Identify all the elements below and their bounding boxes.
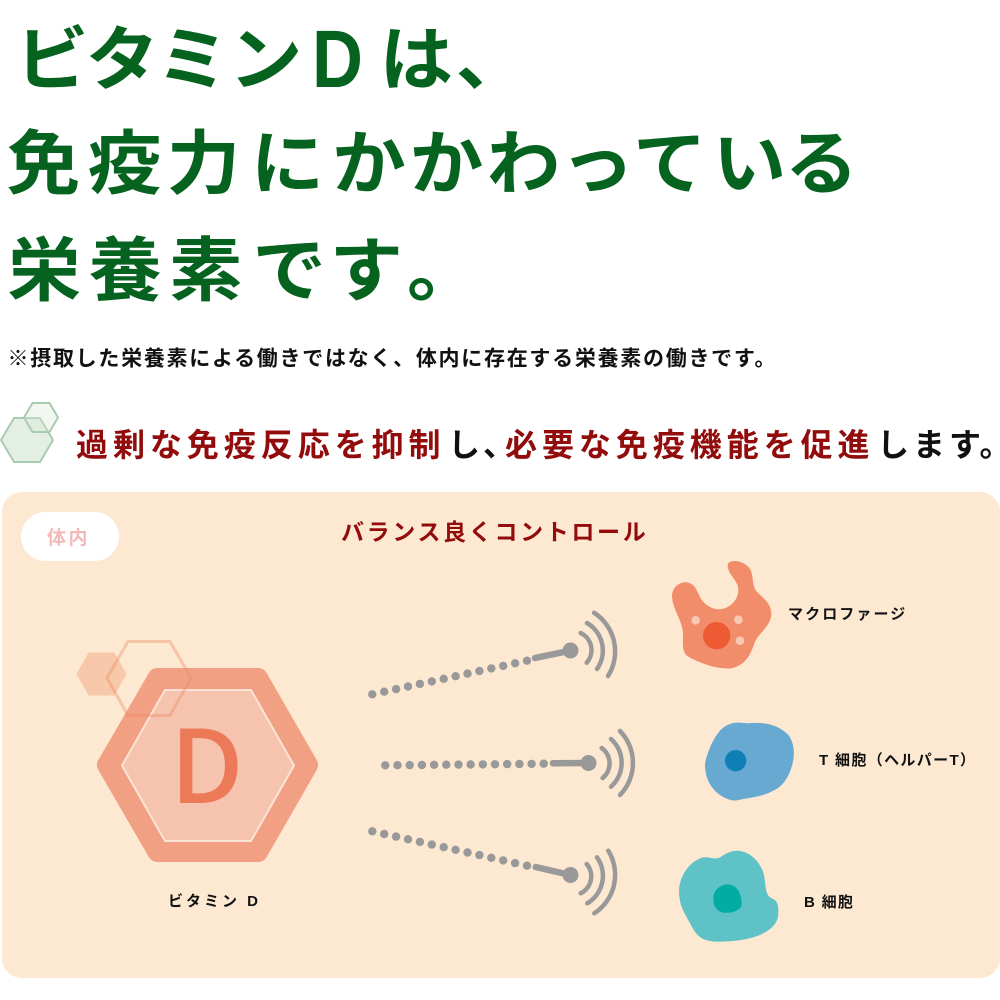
signal arrow: to macrophage xyxy=(368,613,615,698)
pill label: body interior: 体内 xyxy=(47,527,90,549)
panel: body xyxy=(2,492,1000,978)
label: B cell: B 細胞 xyxy=(804,893,854,911)
panel heading: バランス良くコントロール xyxy=(341,519,648,545)
title xyxy=(7,14,858,311)
title: 栄養素です。 xyxy=(7,233,480,311)
icon: green hexagons xyxy=(1,403,58,462)
signal arrow: to B cell xyxy=(368,827,615,913)
icon: macrophage cell xyxy=(672,561,771,669)
icon: T cell xyxy=(705,723,794,801)
icon: vitamin D hexagon xyxy=(77,642,308,852)
label: helper T cell: T 細胞（ヘルパーT） xyxy=(819,751,976,769)
title: D xyxy=(312,14,363,105)
footnote: ※摂取した栄養素による働きではなく、体内に存在する栄養素の働きです。 xyxy=(8,348,777,370)
title: は、 xyxy=(379,22,529,100)
pill label: body interior xyxy=(21,512,119,561)
signal arrow: to T cell xyxy=(381,731,633,795)
title: 免疫力にかかわっている xyxy=(7,126,858,204)
subheading: 必要な免疫機能を促進 xyxy=(505,427,875,463)
subheading: 過剰な免疫反応を抑制 xyxy=(76,427,446,463)
icon: B cell xyxy=(679,851,778,942)
subheading xyxy=(76,427,1000,463)
icon: vitamin D hexagon: D xyxy=(170,685,243,832)
title: ビタミン xyxy=(15,22,303,100)
label: macrophage: マクロファージ xyxy=(788,606,907,623)
label: vitamin D: ビタミン D xyxy=(168,892,261,910)
subheading: し、 xyxy=(448,427,515,463)
